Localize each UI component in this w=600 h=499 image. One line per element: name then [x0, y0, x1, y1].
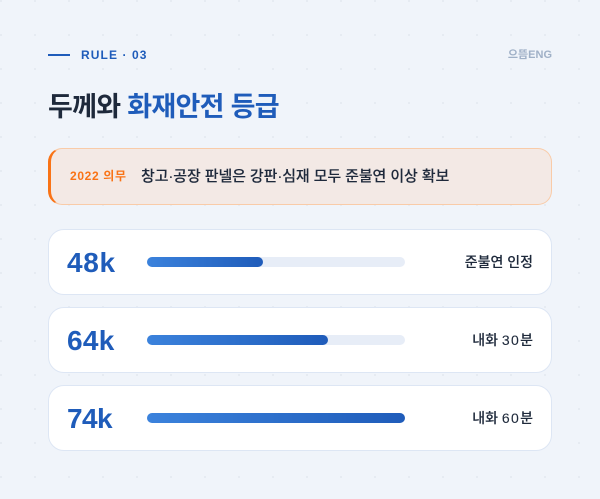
value: 64k	[67, 325, 115, 356]
grade label: 준불연 인정	[465, 254, 533, 270]
card: 64k	[48, 307, 552, 373]
progress bar	[147, 257, 405, 267]
card: 74k	[48, 385, 552, 451]
callout: 2022 obligation	[48, 148, 552, 205]
card: 48k	[48, 229, 552, 295]
eyebrow label: RULE · 03	[81, 48, 148, 62]
progress bar	[147, 413, 405, 423]
value: 74k	[67, 403, 112, 434]
progress bar	[147, 335, 405, 345]
callout tag: 2022 의무	[70, 169, 127, 183]
grade label: 내화 60분	[472, 410, 533, 426]
brand label: 으뜸ENG	[508, 49, 552, 61]
grade label: 내화 30분	[472, 332, 533, 348]
value: 48k	[67, 247, 116, 278]
title: 두께와 화재안전 등급	[48, 92, 279, 122]
header rule line	[48, 54, 70, 56]
callout text: 창고·공장 판넬은 강판·심재 모두 준불연 이상 확보	[141, 168, 449, 185]
